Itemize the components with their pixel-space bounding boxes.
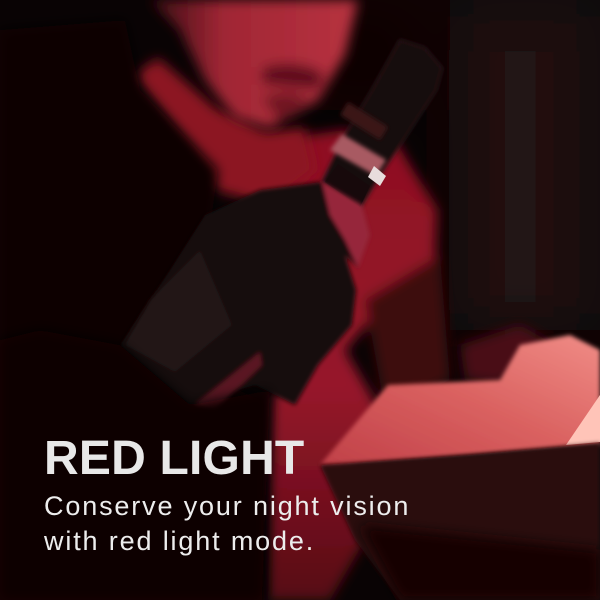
red torso <box>215 130 450 600</box>
subheading: Conserve your night vision <box>44 491 410 521</box>
flashlight <box>322 40 442 208</box>
dark jacket <box>0 20 265 600</box>
scarf <box>134 58 315 205</box>
background glow right <box>300 0 600 330</box>
lower sleeve <box>0 330 270 600</box>
subheading <box>44 491 410 556</box>
face <box>150 0 358 128</box>
map held in the hands <box>320 325 600 600</box>
gloved hand <box>120 182 370 410</box>
subheading: with red light mode. <box>44 526 315 556</box>
heading: RED LIGHT <box>44 432 304 485</box>
